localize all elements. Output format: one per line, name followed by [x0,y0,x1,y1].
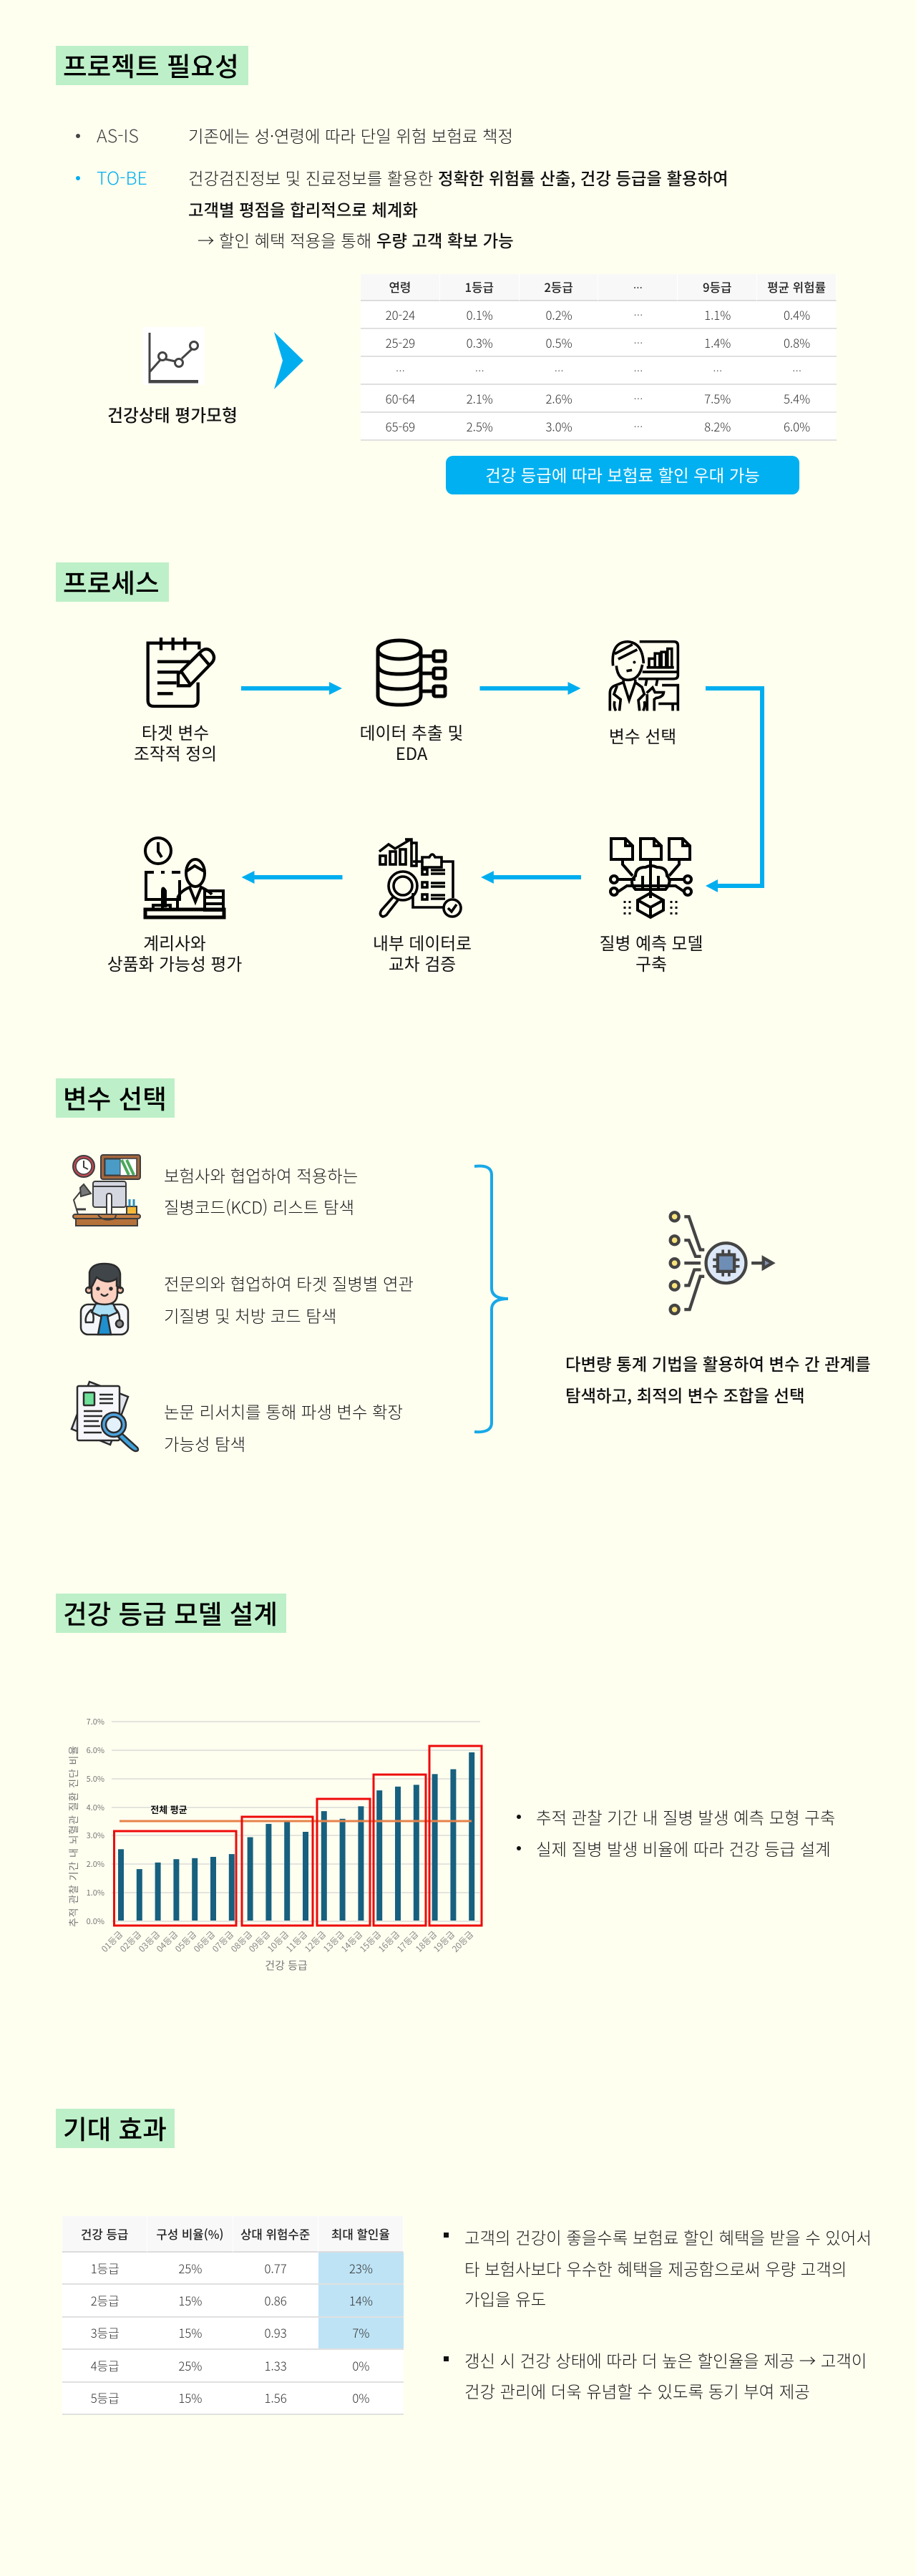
table: 건강 등급별 할인율: 15% [178,2324,202,2341]
icon: database [376,638,447,707]
table: 연령별 등급 위험률: … [475,364,484,377]
bar chart: 추적 관찰 기간 내 뇌혈관 질환 진단 비율 [67,1745,81,1927]
label: 변수 선택: 변수 선택 [609,723,676,748]
callout button [446,456,799,494]
text: 다변량 통계 기법: 다변량 통계 기법을 활용하여 변수 간 관계를 [565,1351,871,1375]
bar chart: 2.0% [87,1858,104,1870]
text 1: 추적 관찰 기간 내 질병 발생 예측 모형 구축 [536,1805,835,1829]
table: 연령별 등급 위험률 [361,274,837,441]
bar chart: 12등급 [302,1928,328,1955]
table: 건강 등급별 할인율 [62,2216,404,2415]
bar chart: 5.0% [87,1773,104,1785]
text block: 갱신: 건강 관리에 더욱 유념할 수 있도록 동기 부여 제공 [464,2379,810,2403]
icon: disease model [609,837,693,919]
icon: presenter [608,640,680,711]
table: 건강 등급별 할인율: 25% [178,2260,202,2277]
text: 보험사 협업: 질병코드(KCD) 리스트 탐색 [164,1194,354,1219]
table: 건강 등급별 할인율: 3등급 [91,2324,120,2341]
table: 건강 등급별 할인율: 0.86 [265,2292,287,2309]
text: 전문의 협업: 전문의와 협업하여 타겟 질병별 연관 [164,1271,414,1295]
label: 내부 데이터로 교차 검증: 내부 데이터로 [373,930,472,955]
table: 연령별 등급 위험률: … [633,308,643,321]
text: 논문 리서치: 논문 리서치를 통해 파생 변수 확장 [164,1399,403,1423]
bullet list [517,1805,835,1860]
table: 연령별 등급 위험률: 0.2% [545,306,572,323]
arrow: chevron [274,332,303,389]
table: 건강 등급별 할인율: 15% [178,2389,202,2406]
bar chart: 13등급 [321,1928,347,1955]
section: 기대 효과 [56,2109,872,2415]
heading: 기대 효과: 기대 효과 [63,2109,167,2147]
bar chart: 04등급 [154,1928,180,1955]
table: 연령별 등급 위험률: 0.1% [467,306,493,323]
TO-BE text line 1: 건강검진정보 및 진료정보를 활용한 정확한 위험률 산출, 건강 등급을 활용하여 [188,165,729,190]
table: 연령별 등급 위험률: … [792,364,802,377]
text block: 갱신: 갱신 시 건강 상태에 따라 더 높은 할인율을 제공 → 고객이 [464,2348,867,2372]
TO-BE label: TO-BE [97,165,147,190]
arrow 4 [242,871,342,884]
bar chart: 01등급 [99,1928,125,1955]
bar chart: 7.0% [87,1716,104,1727]
bar chart: 0.0% [87,1916,104,1927]
bar chart: 4.0% [87,1802,104,1813]
table: 건강 등급별 할인율: 1.33 [265,2357,287,2374]
bullet 1 [517,1815,521,1819]
AS-IS label: AS-IS [97,122,139,148]
label: 내부 데이터로 교차 검증: 교차 검증 [389,950,456,975]
table: 연령별 등급 위험률: 0.8% [784,333,810,351]
bar chart: 14등급 [338,1928,365,1955]
table: 건강 등급별 할인율: 0.93 [265,2324,287,2341]
bar chart: 16등급 [376,1928,402,1955]
label: 타겟 변수 조작적 정의 [134,719,217,765]
icon: actuary at desk [143,836,226,919]
TO-BE text line 2: 고객별 평점을 합리적으로 체계화 [188,197,418,221]
TO-BE text line 3: → 할인 혜택 적용을 통해 우량 고객 확보 가능 [198,228,514,252]
table: 연령별 등급 위험률: 25-29 [386,333,415,351]
table: 건강 등급별 할인율: 건강 등급 [81,2225,128,2243]
bullet [76,134,80,138]
text: 논문 리서치: 가능성 탐색 [164,1431,245,1455]
arrow 1 [241,682,342,695]
bar chart: 05등급 [172,1928,199,1955]
table: 연령별 등급 위험률: … [633,391,643,405]
section: 건강 등급 모델 설계 [56,1594,835,1973]
bar chart: 19등급 [431,1928,457,1955]
table: 연령별 등급 위험률: 5.4% [784,389,810,406]
heading: 건강 등급 모델 설계: 건강 등급 모델 설계 [63,1594,278,1631]
bar chart: 03등급 [136,1928,162,1955]
arrow 2 [479,682,581,695]
table: 연령별 등급 위험률: … [555,364,564,377]
table: 연령별 등급 위험률: 연령 [389,278,411,296]
icon: data verification [379,838,462,918]
bullet [444,2356,449,2361]
bar chart [67,1716,482,1973]
bar chart: 6.0% [87,1745,104,1756]
table: 건강 등급별 할인율: 14% [349,2292,373,2309]
label: 질병 예측 모델 구축: 구축 [635,950,667,975]
table: 건강 등급별 할인율: 23% [349,2260,373,2277]
table: 연령별 등급 위험률: 1.1% [704,306,731,323]
table: 연령별 등급 위험률: 0.4% [784,306,810,323]
bar chart: 건강 등급 [265,1958,308,1973]
bar chart: 06등급 [191,1928,218,1955]
bar chart: 18등급 [413,1928,439,1955]
table: 건강 등급별 할인율: 0% [352,2389,369,2406]
TO-BE row [76,165,729,252]
table: 건강 등급별 할인율: 7% [352,2324,369,2341]
table: 건강 등급별 할인율: 0.77 [265,2260,287,2277]
table: 건강 등급별 할인율: 1등급 [91,2260,120,2277]
heading: 프로젝트 필요성: 프로젝트 필요성 [63,46,239,84]
label: 타겟 변수 조작적 정의: 조작적 정의 [134,740,217,765]
text: 논문 리서치 [164,1399,403,1455]
bar chart: 1.0% [87,1887,104,1898]
table: 연령별 등급 위험률: … [633,364,643,377]
bar chart: 20등급 [449,1928,476,1955]
table: 건강 등급별 할인율: 25% [178,2357,202,2374]
AS-IS text: 기존에는 성·연령에 따라 단일 위험 보험료 책정 [188,123,513,147]
bar chart: 3.0% [87,1830,104,1841]
brace [474,1165,508,1434]
section: 프로젝트 필요성 [56,46,837,494]
heading: 프로세스: 프로세스 [63,562,160,600]
label: 데이터 추출 및 EDA: 데이터 추출 및 [360,719,463,744]
table: 연령별 등급 위험률: … [633,336,643,349]
bar chart: 15등급 [357,1928,384,1955]
table: 연령별 등급 위험률: 8.2% [704,418,731,435]
table: 건강 등급별 할인율: 구성 비율(%) [156,2225,223,2243]
bar chart: 10등급 [265,1928,291,1955]
text: 다변량 통계 기법: 탐색하고, 최적의 변수 조합을 선택 [565,1382,804,1407]
icon: paper research [70,1380,139,1453]
connector arrow [706,686,764,892]
label: 건강상태 평가모형: 건강상태 평가모형 [107,401,238,426]
arrow 3 [481,871,581,884]
icon: notepad [146,638,216,708]
section: 변수 선택 [56,1078,871,1455]
table: 건강 등급별 할인율: 4등급 [91,2357,120,2374]
bar chart: 11등급 [283,1928,310,1955]
table: 연령별 등급 위험률: 6.0% [784,418,810,435]
bar chart: 전체 평균 [150,1802,187,1816]
label: 질병 예측 모델 구축 [600,930,703,975]
table: 연령별 등급 위험률: 3.0% [545,418,572,435]
icon: office desk [72,1154,141,1226]
bullet [444,2233,449,2238]
table: 연령별 등급 위험률: … [633,280,643,293]
text: 보험사 협업 [164,1163,358,1219]
text block: 혜택: 타 보험사보다 우수한 혜택을 제공함으로써 우량 고객의 [464,2256,847,2280]
bar chart: 07등급 [210,1928,236,1955]
bar chart: 09등급 [246,1928,273,1955]
bar chart: 08등급 [228,1928,255,1955]
table: 연령별 등급 위험률: 0.5% [545,333,572,351]
text block: 갱신 [444,2348,867,2403]
heading: 변수 선택: 변수 선택 [63,1078,167,1116]
table: 연령별 등급 위험률: 0.3% [467,333,493,351]
icon: chip with inputs [668,1211,776,1315]
bar chart: 02등급 [117,1928,144,1955]
table: 건강 등급별 할인율: 최대 할인율 [331,2225,390,2243]
table: 연령별 등급 위험률: 60-64 [386,389,415,406]
label: 데이터 추출 및 EDA: EDA [396,740,427,765]
table: 연령별 등급 위험률: 9등급 [703,278,731,296]
label: 데이터 추출 및 EDA [360,719,463,765]
bullet 2 [517,1846,521,1850]
table: 연령별 등급 위험률: 2등급 [544,278,573,296]
table: 건강 등급별 할인율: 상대 위험수준 [240,2225,310,2243]
section: 프로세스 [56,562,764,975]
text: 다변량 통계 기법 [565,1351,871,1407]
text: 전문의 협업: 기질병 및 처방 코드 탐색 [164,1303,336,1327]
text: 보험사 협업: 보험사와 협업하여 적용하는 [164,1163,358,1187]
table: 연령별 등급 위험률: 65-69 [386,418,415,435]
label: 계리사와 상품화 가능성 평가: 계리사와 [143,930,206,955]
table: 연령별 등급 위험률: 7.5% [704,389,731,406]
callout button: 건강 등급에 따라 보험료 할인 우대 가능 [485,462,760,487]
label: 계리사와 상품화 가능성 평가: 상품화 가능성 평가 [107,950,242,975]
table: 건강 등급별 할인율: 2등급 [91,2292,120,2309]
table: 연령별 등급 위험률: 20-24 [386,306,415,323]
table: 연령별 등급 위험률: 2.5% [467,418,493,435]
label: 질병 예측 모델 구축: 질병 예측 모델 [600,930,703,955]
table: 연령별 등급 위험률: … [633,419,643,433]
label: 계리사와 상품화 가능성 평가 [107,930,242,975]
icon: line chart [143,327,205,385]
table: 연령별 등급 위험률: 1.4% [704,333,731,351]
bullet [76,176,80,180]
table: 연령별 등급 위험률: … [396,364,405,377]
text block: 혜택 [444,2225,872,2311]
label: 내부 데이터로 교차 검증 [373,930,472,975]
text block: 혜택: 고객의 건강이 좋을수록 보험료 할인 혜택을 받을 수 있어서 [464,2225,872,2249]
table: 건강 등급별 할인율: 15% [178,2292,202,2309]
table: 연령별 등급 위험률: 2.6% [545,389,572,406]
AS-IS row [76,122,513,148]
text: 전문의 협업 [164,1271,414,1327]
text 2: 실제 질병 발생 비율에 따라 건강 등급 설계 [536,1836,831,1860]
table: 연령별 등급 위험률: 1등급 [465,278,494,296]
table: 연령별 등급 위험률: 평균 위험률 [767,278,826,296]
bar chart: 17등급 [394,1928,421,1955]
table: 건강 등급별 할인율: 5등급 [91,2389,120,2406]
label: 타겟 변수 조작적 정의: 타겟 변수 [142,719,209,744]
text block: 혜택: 가입을 유도 [464,2286,546,2311]
table: 건강 등급별 할인율: 1.56 [265,2389,287,2406]
table: 연령별 등급 위험률: 2.1% [467,389,493,406]
table: 건강 등급별 할인율: 0% [352,2357,369,2374]
icon: doctor [80,1262,129,1335]
table: 연령별 등급 위험률: … [713,364,722,377]
